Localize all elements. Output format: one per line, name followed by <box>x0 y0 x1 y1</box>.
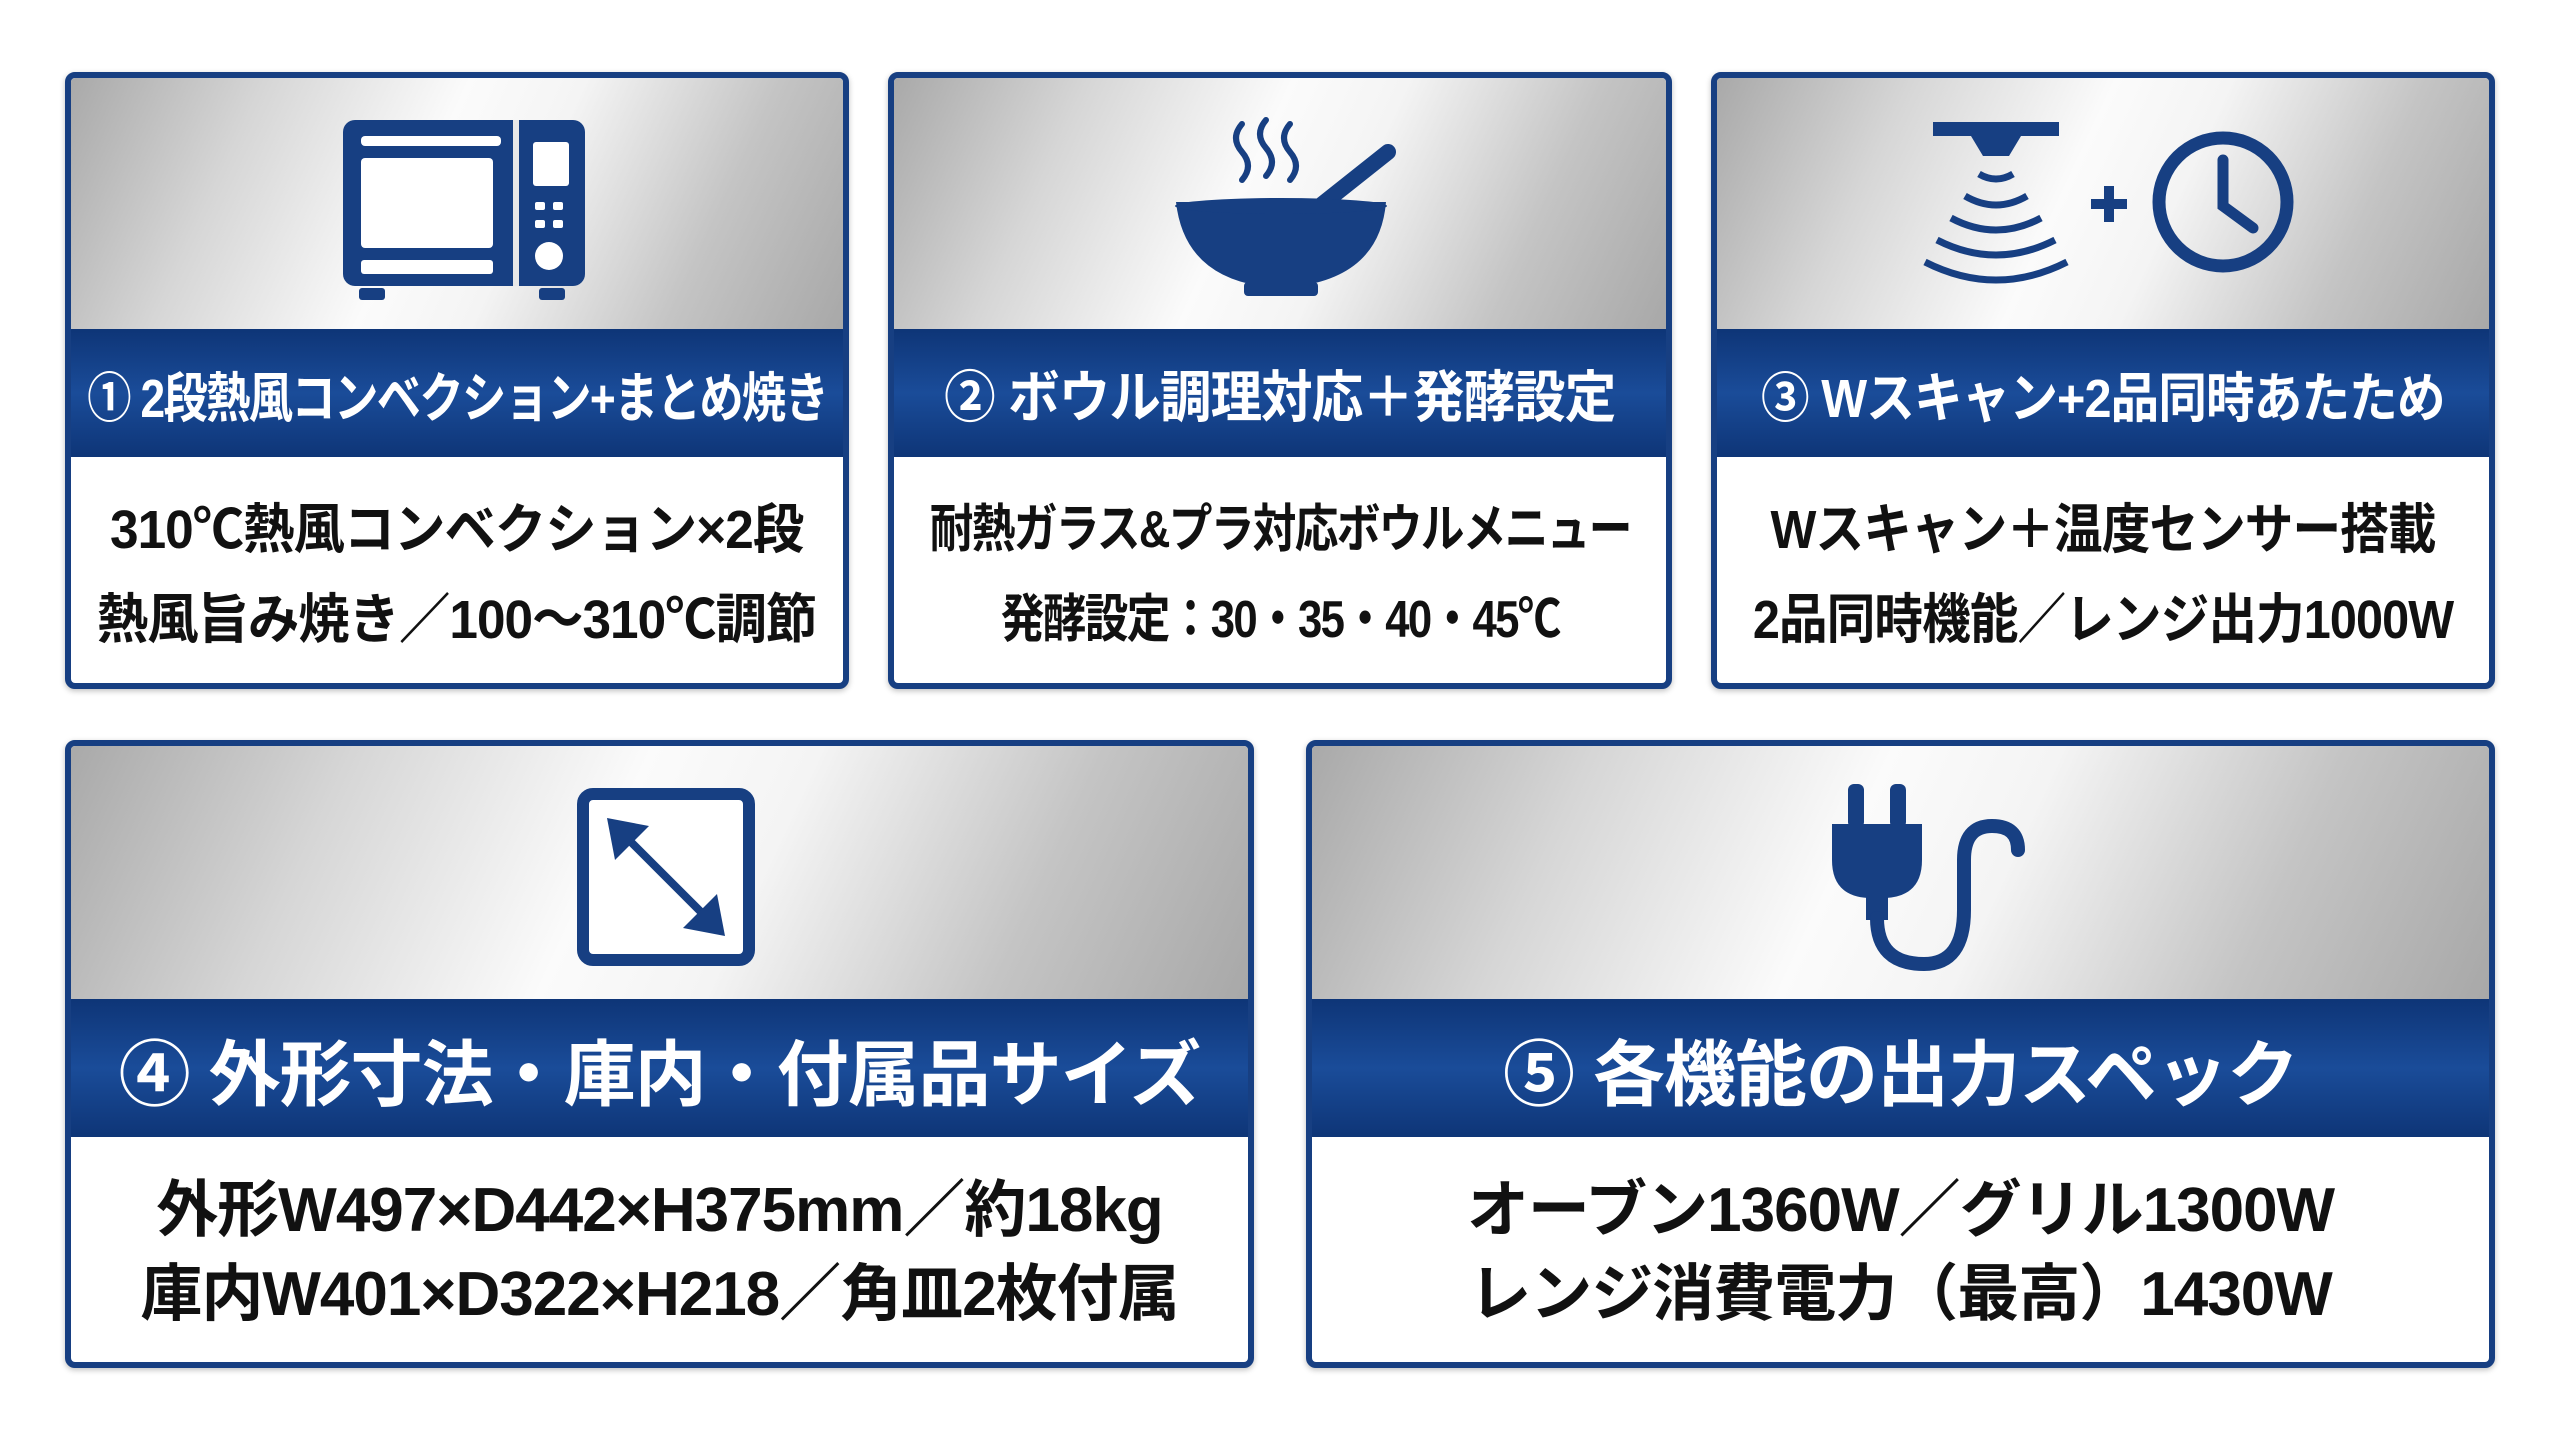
header 2: ② ボウル調理対応＋発酵設定 <box>944 366 1616 428</box>
body text 4: 庫内W401×D322×H218／角皿2枚付属 <box>140 1260 1179 1329</box>
header 1: ① 2段熱風コンベクション+まとめ焼き <box>87 368 827 428</box>
body text 3: 2品同時機能／レンジ出力1000W <box>1753 590 2453 650</box>
panel: 4 dimensions <box>65 740 1254 1368</box>
body text 5: レンジ消費電力（最高）1430W <box>1469 1260 2332 1329</box>
header 3: ③ Wスキャン+2品同時あたため <box>1761 368 2445 428</box>
icon: sensor plus clock <box>1924 122 2294 284</box>
body text 1: 310℃熱風コンベクション×2段 <box>110 500 804 560</box>
body text 1 <box>97 500 817 650</box>
body text 4: 外形W497×D442×H375mm／約18kg <box>156 1176 1163 1245</box>
body text 3: Wスキャン＋温度センサー搭載 <box>1770 500 2436 560</box>
body text 2 <box>930 501 1631 649</box>
body text 5: オーブン1360W／グリル1300W <box>1467 1176 2334 1245</box>
header 3 <box>1717 329 2489 457</box>
header 1 <box>71 329 843 457</box>
icon: microwave oven <box>343 120 585 300</box>
body text 4 <box>140 1176 1179 1329</box>
header 5: ⑤ 各機能の出力スペック <box>1503 1036 2298 1116</box>
header 4 <box>71 999 1248 1137</box>
body text 2: 発酵設定：30・35・40・45℃ <box>1001 591 1559 649</box>
icon: steaming bowl <box>1175 117 1396 296</box>
header 5 <box>1312 999 2489 1137</box>
body text 1: 熱風旨み焼き／100〜310℃調節 <box>97 590 817 650</box>
icon: diagonal arrow box <box>577 788 755 966</box>
header 4: ④ 外形寸法・庫内・付属品サイズ <box>119 1036 1200 1116</box>
body text 2: 耐熱ガラス&プラ対応ボウルメニュー <box>930 501 1631 559</box>
body text 5 <box>1467 1176 2335 1329</box>
body text 3 <box>1753 500 2454 650</box>
panel: 3 scan <box>1711 72 2495 689</box>
panel: 5 power <box>1306 740 2495 1368</box>
panel: 1 convection <box>65 72 849 689</box>
icon: plug <box>1832 784 2025 971</box>
header 2 <box>894 329 1666 457</box>
panel: 2 bowl <box>888 72 1672 689</box>
